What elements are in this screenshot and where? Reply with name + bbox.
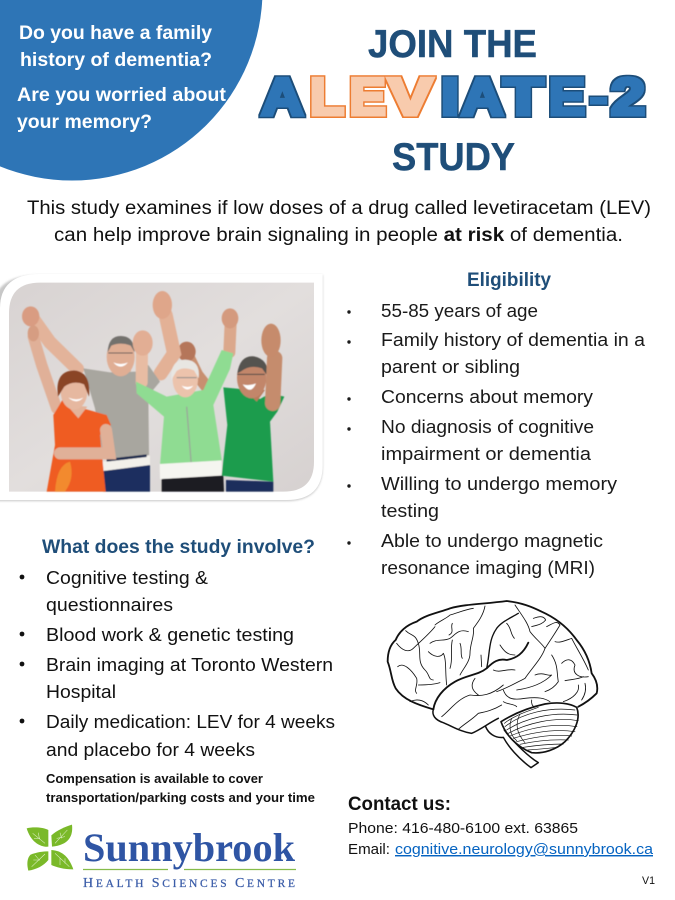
cerebellum [501, 703, 578, 753]
list: study involvement: Hospital [46, 682, 116, 702]
heading: what does the study involve: What does the study involve? [42, 537, 315, 558]
study name: ALEVIATE-2: E [549, 68, 585, 126]
logo: Sunnybrook Health Sciences Centre [27, 825, 296, 891]
back arm of man in green [187, 354, 208, 389]
study name: ALEVIATE-2: T [503, 68, 543, 126]
callout circle: screening questions [0, 0, 262, 180]
study description [27, 198, 651, 246]
heading: eligibility: Eligibility [467, 270, 551, 291]
temporal lobe and lateral fissure [433, 643, 528, 709]
folds [397, 605, 588, 729]
list: eligibility criteria [347, 301, 646, 578]
list: eligibility criteria: No diagnosis of cognitive [381, 417, 594, 437]
man in grey [32, 317, 77, 369]
woman in light green [124, 347, 160, 382]
compensation note: Compensation is available to cover [46, 772, 263, 786]
version label: V1 [642, 875, 655, 887]
photo: four smiling older adults with raised arms [0, 274, 323, 501]
woman in orange [33, 337, 57, 408]
study description: can help improve brain signaling in people at risk of dementia. [54, 225, 623, 246]
contact details: Contact us: [348, 793, 451, 815]
study name: ALEVIATE-2: 2 [611, 68, 645, 126]
cerebrum outline [388, 601, 597, 709]
list: eligibility criteria: 55-85 years of age [381, 301, 538, 321]
callout circle: screening questions: your memory? [17, 111, 152, 133]
list: eligibility criteria: parent or sibling [381, 357, 520, 377]
title [261, 23, 645, 179]
contact details [348, 793, 654, 858]
logo: Sunnybrook Health Sciences Centre: Sunnybrook [83, 825, 296, 870]
study name: ALEVIATE-2: V [388, 68, 432, 126]
list: study involvement: Daily medication: LEV for 4 weeks [46, 712, 335, 732]
callout circle: screening questions: history of dementia? [20, 49, 212, 71]
list: eligibility criteria: testing [381, 501, 439, 521]
study description: This study examines if low doses of a drug called levetiracetam (LEV) [27, 198, 651, 219]
title: STUDY [392, 136, 515, 179]
list: eligibility criteria: impairment or dementia [381, 444, 592, 464]
brain stem [486, 727, 538, 768]
list: study involvement: Cognitive testing & [46, 568, 208, 588]
callout circle: screening questions: Do you have a family [19, 22, 212, 44]
man in green [222, 387, 284, 482]
list: study involvement [20, 568, 335, 760]
email link: cognitive.neurology@sunnybrook.ca [395, 842, 654, 858]
study name: ALEVIATE-2: I [441, 68, 459, 126]
icon: brain line drawing [388, 601, 597, 768]
study name: ALEVIATE-2: A [261, 68, 303, 126]
logo: Sunnybrook Health Sciences Centre: HEALTH SCIENCES CENTRE [83, 876, 295, 891]
list: study involvement: Blood work & genetic testing [46, 625, 294, 645]
compensation note: transportation/parking costs and your time [46, 791, 315, 805]
contact details: Email: [348, 842, 390, 858]
study name: ALEVIATE-2 [261, 68, 645, 126]
list: study involvement: and placebo for 4 weeks [46, 740, 255, 760]
list: eligibility criteria: resonance imaging (MRI) [381, 558, 595, 578]
list: study involvement: questionnaires [46, 595, 173, 615]
callout circle: screening questions: Are you worried about [17, 84, 226, 106]
title: JOIN THE [368, 23, 537, 66]
list: eligibility criteria: Able to undergo magnetic [381, 531, 603, 551]
list: study involvement: Brain imaging at Toronto Western [46, 655, 333, 675]
list: eligibility criteria: Concerns about memory [381, 387, 593, 407]
contact details: Phone: 416-480-6100 ext. 63865 [348, 821, 578, 837]
icon: four green leaves [27, 825, 73, 871]
list: eligibility criteria: Family history of dementia in a [381, 330, 646, 350]
study name: ALEVIATE-2: E [350, 68, 386, 126]
list: eligibility criteria: Willing to undergo memory [381, 474, 617, 494]
study name: ALEVIATE-2: A [461, 68, 503, 126]
compensation note [46, 772, 315, 805]
study name: ALEVIATE-2: L [310, 68, 344, 126]
